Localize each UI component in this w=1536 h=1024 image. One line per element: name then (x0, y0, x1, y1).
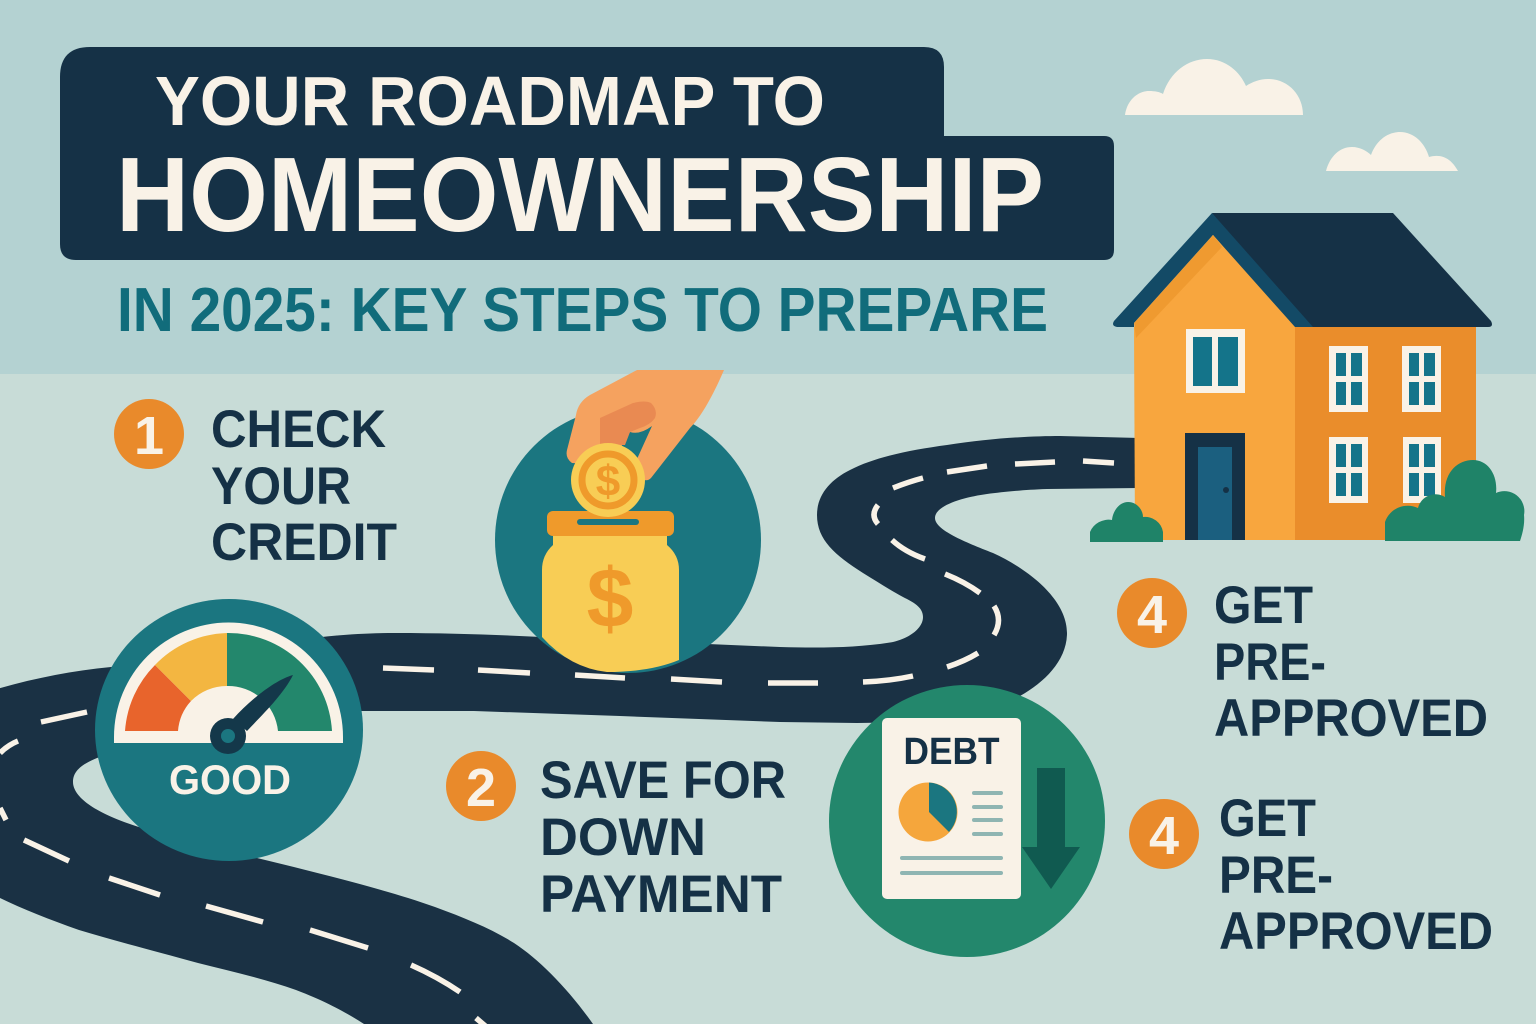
step 1 label: 1 (134, 406, 164, 466)
icon: clouds (1125, 59, 1458, 171)
icon: credit gauge: GOOD (169, 756, 291, 803)
step 2 label (446, 751, 786, 924)
icon: savings jar: $ (596, 457, 620, 506)
icon: debt document: DEBT (904, 731, 1000, 773)
step 1 label: CREDIT (211, 513, 397, 572)
title line 1: YOUR ROADMAP TO (155, 62, 825, 140)
step 4 duplicate label: PRE- (1219, 846, 1333, 905)
step 2 label: 2 (466, 758, 496, 818)
step 4 duplicate label (1129, 789, 1493, 961)
step 2 label: DOWN (540, 808, 706, 867)
road centre dashes (0, 461, 1114, 1024)
house windows (1186, 329, 1441, 503)
step 4 label: APPROVED (1214, 689, 1488, 748)
step 4 label: PRE- (1214, 633, 1326, 692)
door (1185, 433, 1245, 540)
step 2 label: SAVE FOR (540, 751, 786, 810)
step 4 duplicate label: 4 (1149, 806, 1179, 866)
subtitle: IN 2025: KEY STEPS TO PREPARE (117, 276, 1048, 345)
icon: savings jar (495, 370, 761, 673)
icon: savings jar: $ (587, 551, 633, 645)
title banner (60, 47, 1114, 260)
road (0, 436, 1140, 1024)
icon: debt document (829, 685, 1105, 957)
title line 2: HOMEOWNERSHIP (116, 136, 1044, 254)
step 4 label: 4 (1137, 585, 1167, 645)
step 4 duplicate label: APPROVED (1219, 902, 1493, 961)
icon: credit gauge (95, 599, 363, 861)
step 1 label: YOUR (211, 457, 351, 516)
step 4 label: GET (1214, 576, 1313, 635)
step 1 label (114, 399, 397, 572)
step 4 duplicate label: GET (1219, 789, 1316, 848)
step 2 label: PAYMENT (540, 865, 782, 924)
bushes (1090, 460, 1524, 542)
house (1090, 213, 1524, 542)
step 1 label: CHECK (211, 400, 386, 459)
step 4 label (1117, 576, 1488, 748)
